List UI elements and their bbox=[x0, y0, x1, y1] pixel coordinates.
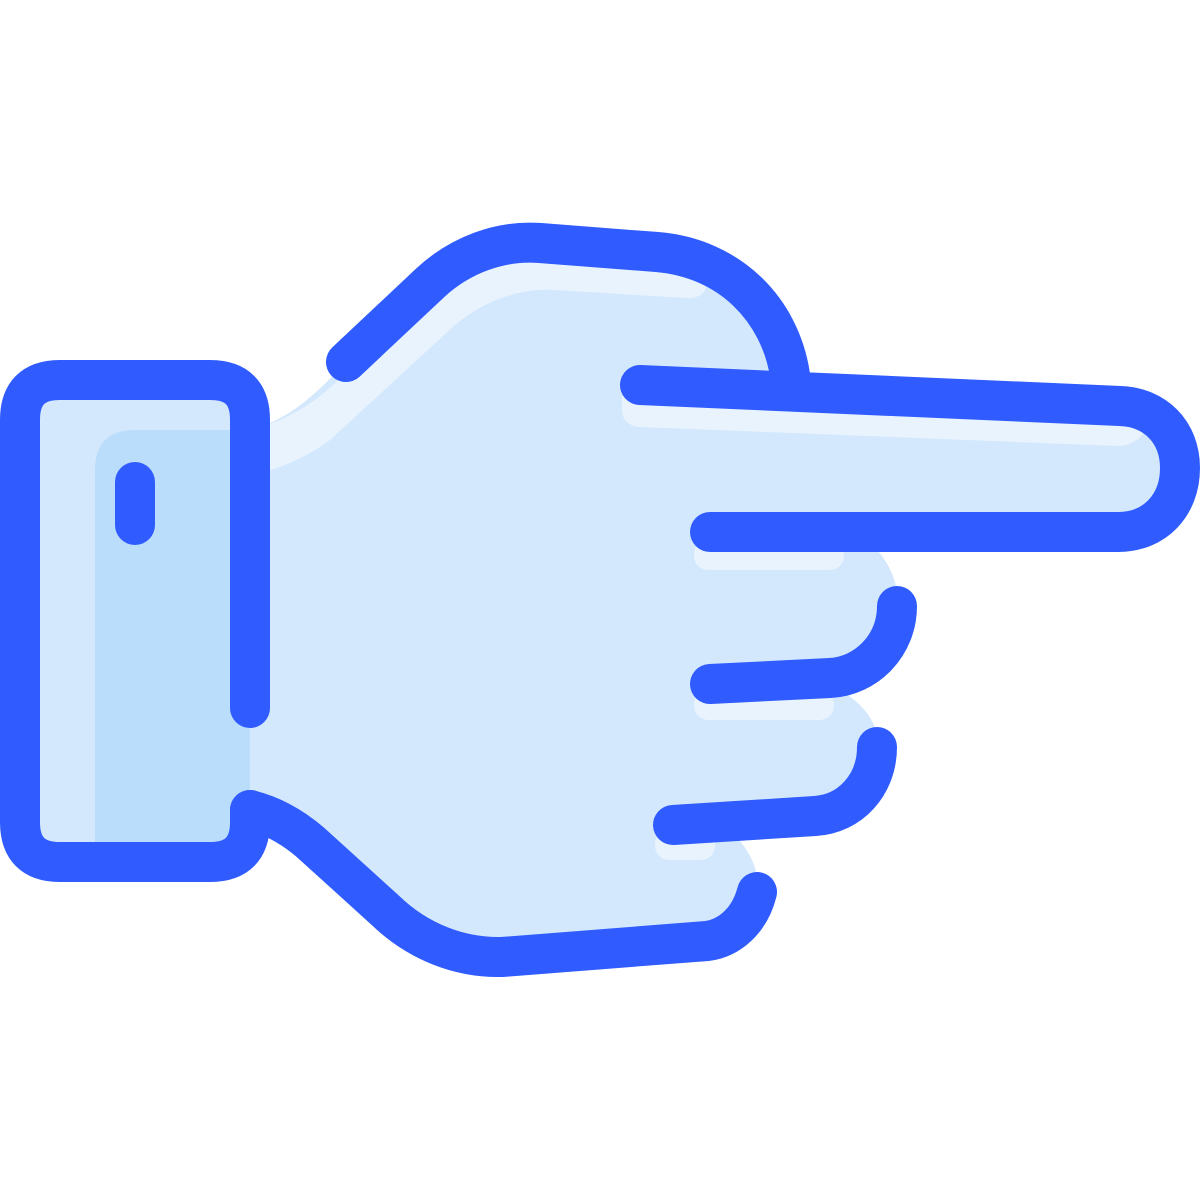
hand fill bbox=[250, 243, 1183, 957]
outlines bbox=[20, 243, 1180, 957]
cuff bbox=[20, 380, 250, 862]
